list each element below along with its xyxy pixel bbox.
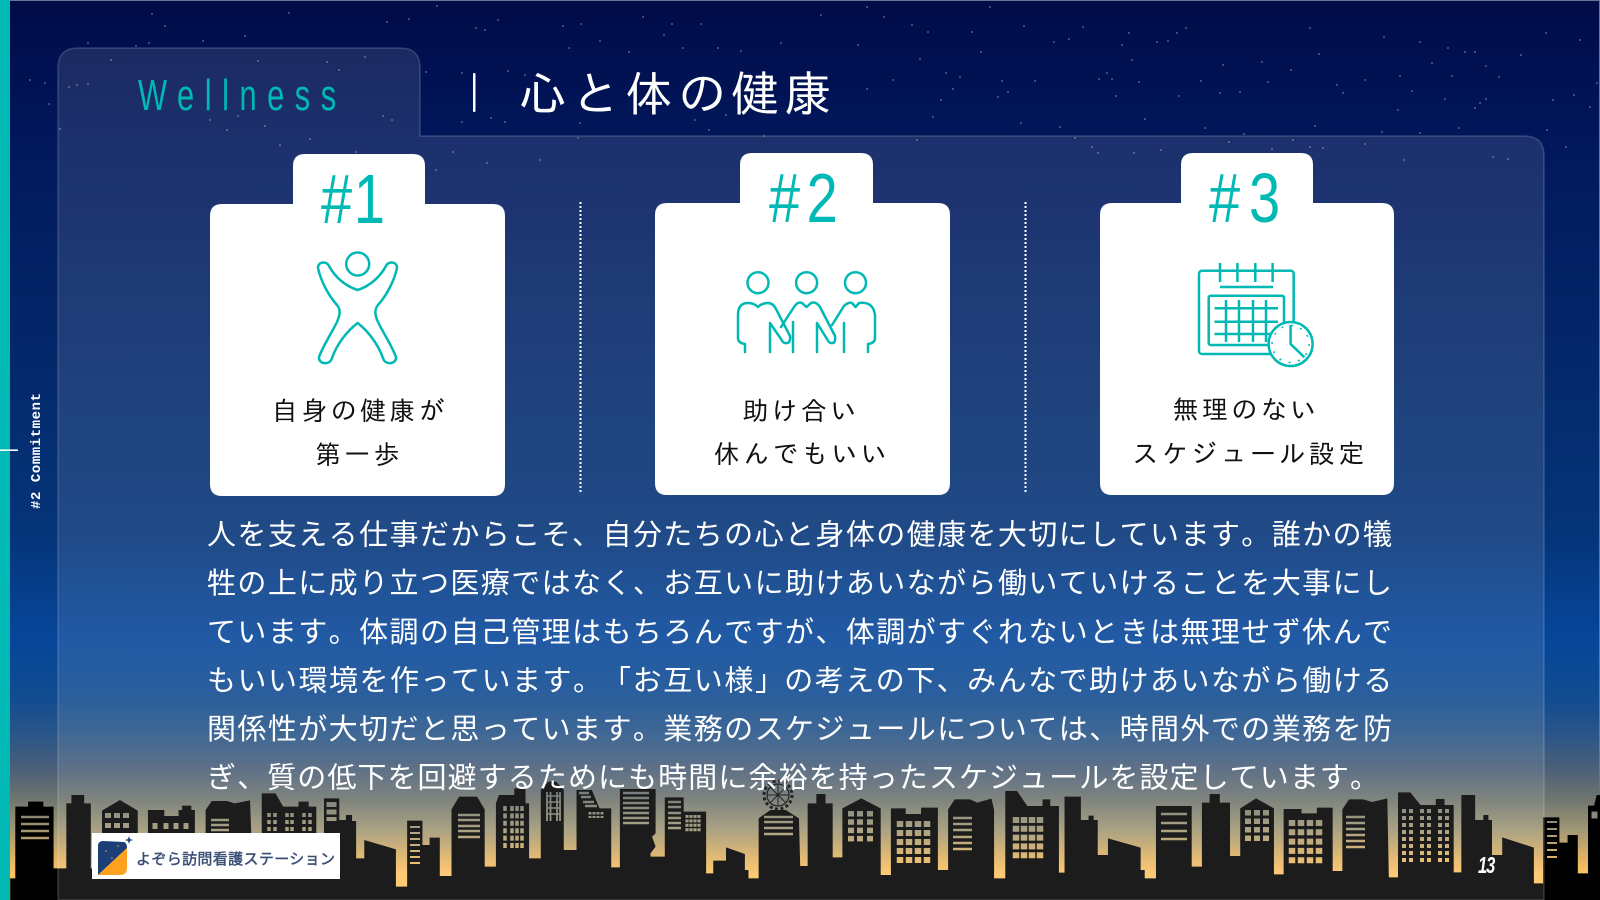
card 2 caption: 助け合い [742, 396, 860, 426]
card 3 [1100, 153, 1394, 495]
page number: 13 [1478, 853, 1495, 879]
teal side bar [0, 0, 10, 900]
card 1 caption: 第一歩 [315, 440, 403, 470]
number #3: #3 [1209, 160, 1280, 237]
tab label: Wellness: Wellness [138, 72, 336, 120]
body text: 人を支える仕事だからこそ、自分たちの心と身体の健康を大切にしています。誰かの犠 [207, 518, 1392, 552]
stars [30, 6, 1597, 170]
section marker tick [0, 449, 18, 451]
logo badge [92, 833, 340, 879]
card 1 [210, 154, 505, 496]
city skyline silhouette [10, 782, 1600, 900]
ferris wheel [764, 781, 792, 809]
card 2 caption [714, 396, 890, 469]
icon: three people holding hands [738, 272, 875, 352]
body text [207, 518, 1392, 795]
body text: 「お互い様」 [602, 665, 784, 698]
card shape [655, 153, 950, 495]
card 2 [655, 153, 950, 495]
card 1 caption [272, 396, 448, 470]
body text: 牲の上に成り立つ医療ではなく、お互いに助けあいながら働いていけることを大事にし [207, 567, 1392, 600]
card 3 caption [1132, 395, 1368, 469]
card shape [210, 154, 505, 496]
card 1 caption: 自身の健康が [272, 396, 448, 426]
building windows [21, 792, 1597, 866]
vertical section label: #2 Commitment [29, 393, 45, 509]
logo mark [98, 836, 133, 875]
body text: の考えの下、みんなで助けあいながら働ける [784, 665, 1392, 698]
divider 1 [580, 202, 582, 494]
number #2: #2 [769, 160, 838, 237]
top edge line [0, 0, 1600, 1]
card shape [1100, 153, 1394, 495]
body text: もいい環境を作っています。 [207, 665, 602, 698]
right edge line [1599, 0, 1600, 790]
body text: ています。体調の自己管理はもちろんですが、体調がすぐれないときは無理せず休んで [207, 616, 1392, 649]
body text: ぎ、質の低下を回避するためにも時間に余裕を持ったスケジュールを設定しています。 [207, 762, 1379, 795]
heading: 心と体の健康 [519, 69, 837, 122]
divider 2 [1024, 202, 1026, 494]
body text: 関係性が大切だと思っています。業務のスケジュールについては、時間外での業務を防 [207, 713, 1392, 746]
number #1: #1 [321, 161, 385, 238]
logo wordmark: よぞら訪問看護ステーション [136, 851, 335, 868]
icon: person with raised arms [318, 252, 397, 363]
card 3 caption: 無理のない [1172, 395, 1320, 425]
card 2 caption: 休んでもいい [714, 439, 890, 469]
icon: calendar with clock [1199, 263, 1313, 366]
card 3 caption: スケジュール設定 [1132, 439, 1368, 469]
